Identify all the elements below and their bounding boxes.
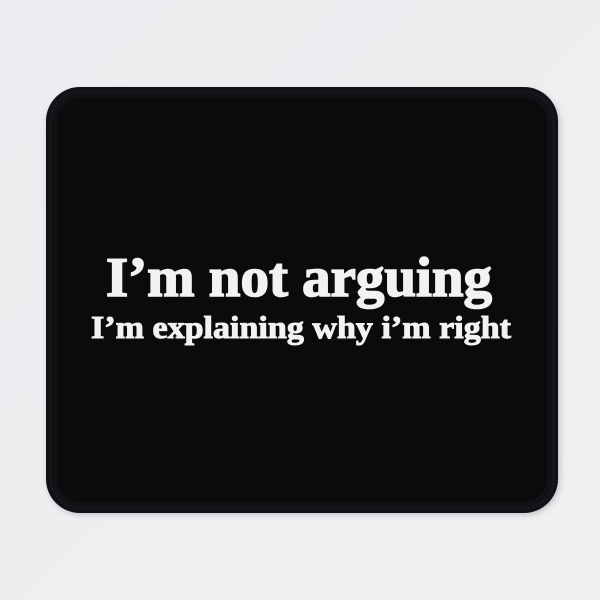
subheadline: I’m explaining why i’m right [91, 309, 511, 345]
slogan text [91, 247, 511, 345]
mat shadow [47, 90, 560, 515]
mouse pad body [46, 87, 558, 513]
headline: I’m not arguing [106, 247, 492, 309]
